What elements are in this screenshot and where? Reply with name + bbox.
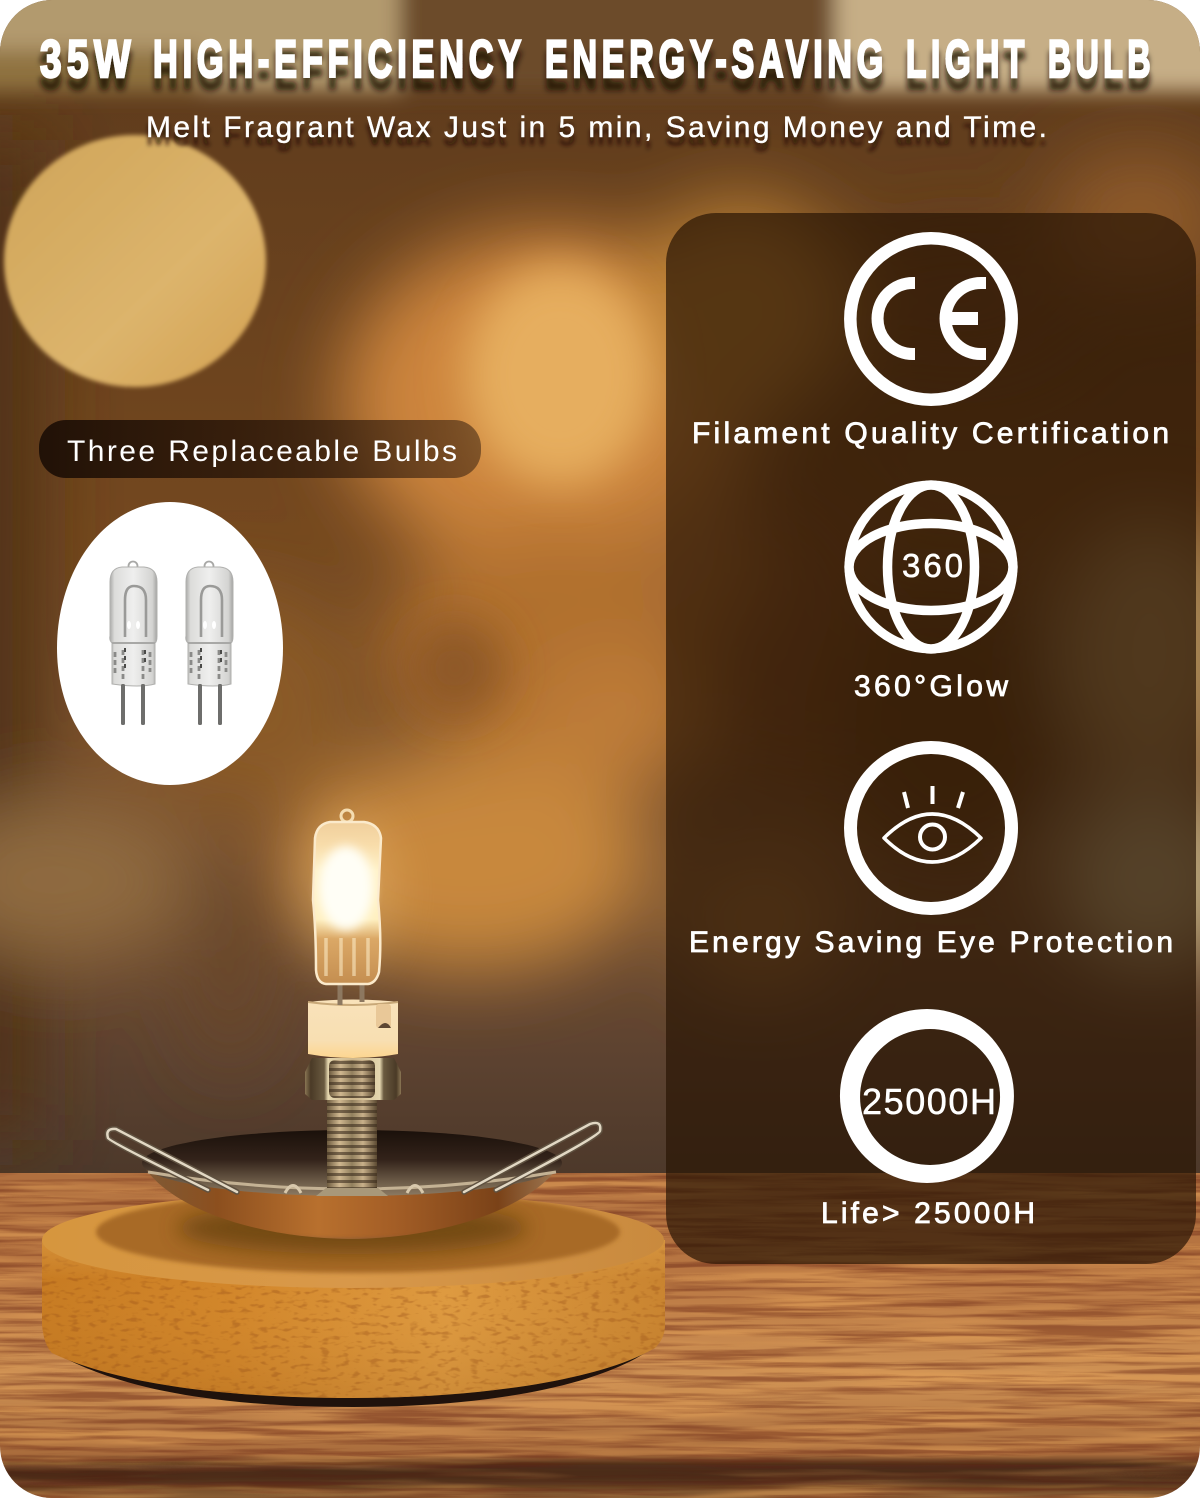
icon: spare bulb left <box>110 562 157 725</box>
threaded bolt <box>316 1098 388 1196</box>
bright bokeh <box>465 265 655 485</box>
pill: three replaceable bulbs <box>39 420 481 478</box>
left handle <box>107 1129 237 1192</box>
subtitle: Melt Fragrant Wax Just in 5 min, Saving Money and Time. <box>146 111 1047 144</box>
panel: features backdrop <box>666 213 1196 1264</box>
label: life over 25000H: Life> 25000H <box>821 1197 1035 1230</box>
icon: CE certification mark <box>850 238 1012 400</box>
white oval with two spare bulbs <box>57 502 283 785</box>
pill: three replaceable bulbs: Three Replaceable Bulbs <box>67 435 457 468</box>
bulb pins <box>340 985 362 1005</box>
rivet loops <box>285 1186 423 1193</box>
large bokeh circle <box>4 135 266 387</box>
label: energy saving eye protection: Energy Saving Eye Protection <box>689 926 1173 959</box>
blurred wall lights <box>0 140 1200 1140</box>
label: 360 glow: 360°Glow <box>854 670 1008 703</box>
icon: spare bulb right <box>186 562 233 725</box>
title: ENERGY-SAVING <box>545 30 888 89</box>
title: HIGH-EFFICIENCY <box>153 30 526 89</box>
top band <box>0 0 1200 92</box>
icon: 25000H lifetime ring <box>840 1009 1014 1183</box>
metal wax dish <box>107 1123 600 1245</box>
glowing capsule <box>313 810 381 984</box>
label: filament quality certification: Filament Quality Certification <box>692 417 1169 450</box>
icon: 360 globe <box>849 485 1013 649</box>
icon: 25000H lifetime ring: 25000H <box>862 1081 996 1122</box>
hex nut <box>305 1058 401 1100</box>
wooden lamp base <box>40 1191 670 1407</box>
title: LIGHT <box>906 30 1029 89</box>
right handle <box>464 1123 600 1192</box>
wooden table <box>0 1173 1200 1500</box>
title <box>40 30 1155 89</box>
title: 35W <box>40 30 136 89</box>
icon: 360 globe: 360 <box>902 547 963 584</box>
icon: eye protection <box>850 748 1012 908</box>
lamp post with bulb <box>296 810 401 1196</box>
ceramic holder <box>308 1000 398 1058</box>
